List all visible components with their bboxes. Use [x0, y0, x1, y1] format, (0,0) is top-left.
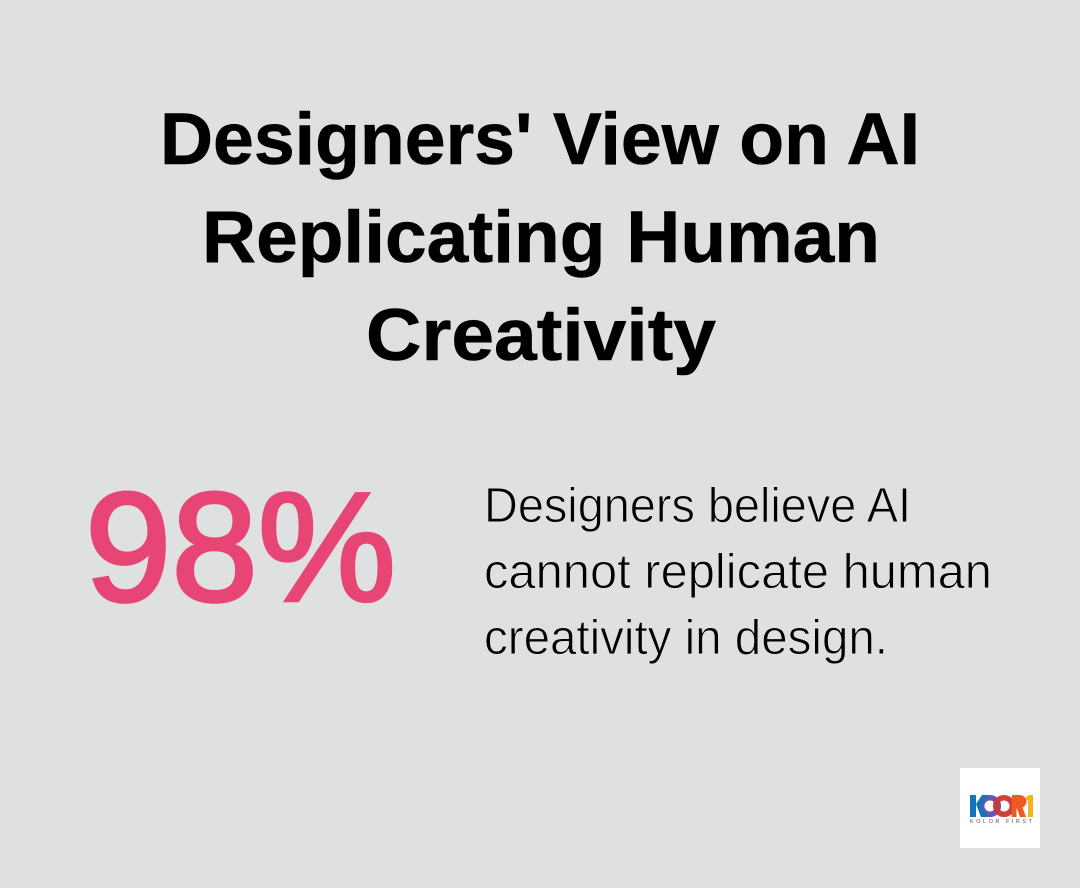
- logo: KOOR1 Kolor First: [960, 768, 1040, 848]
- statistic: 98%: 98%: [85, 460, 396, 634]
- description text: creativity in design.: [484, 611, 888, 665]
- logo tagline: KOLOR FIRST: [970, 819, 1033, 825]
- title: [160, 99, 920, 376]
- logo letters O O: [982, 798, 1012, 814]
- title: Creativity: [366, 295, 716, 376]
- logo digit 1: [1026, 795, 1033, 817]
- description text: Designers believe AI: [484, 479, 911, 533]
- description text: cannot replicate human: [484, 545, 992, 599]
- description text: [484, 479, 992, 665]
- title: Replicating Human: [202, 197, 880, 278]
- logo R: [1012, 795, 1026, 817]
- title: Designers' View on AI: [160, 99, 920, 180]
- logo K: [970, 795, 988, 817]
